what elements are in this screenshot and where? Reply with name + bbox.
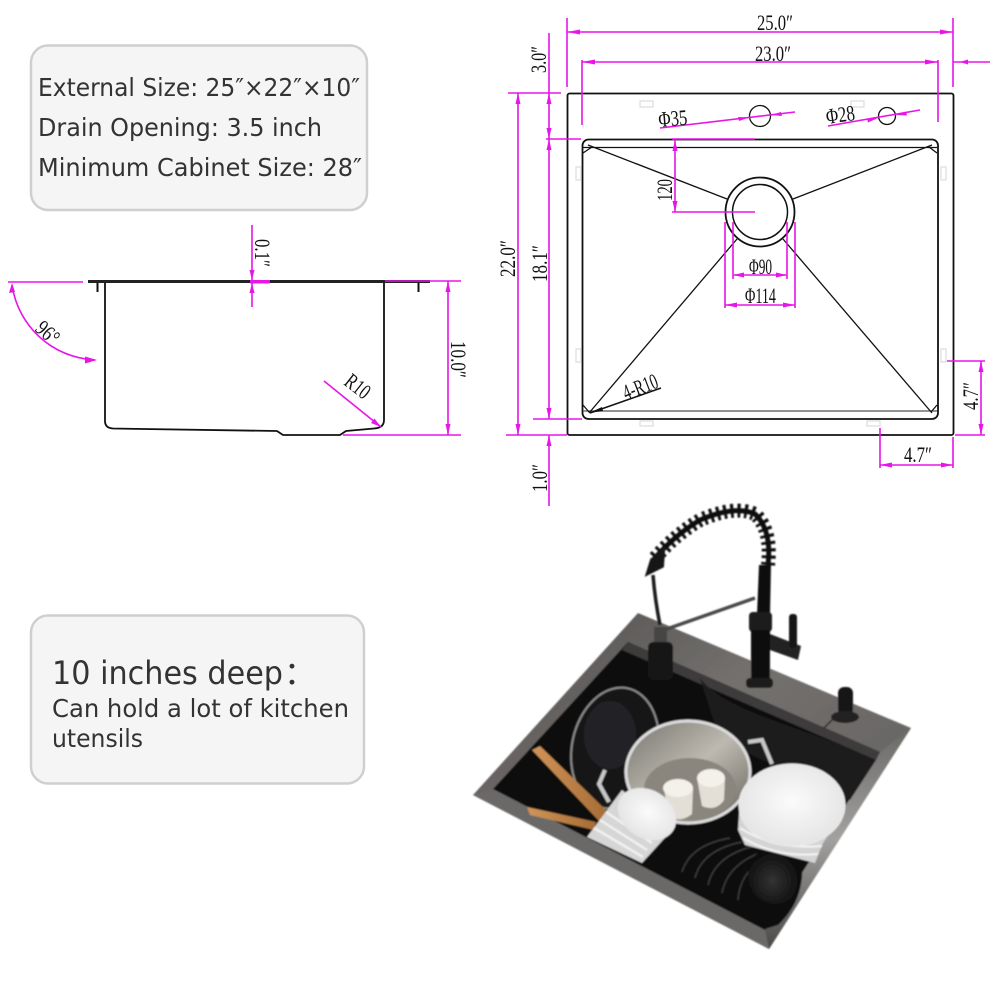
dimension: 120: 120 — [652, 179, 677, 201]
text: drain opening: Drain Opening: 3.5 inch — [38, 113, 322, 142]
wok pan — [560, 679, 670, 817]
mounting clips — [576, 101, 946, 426]
dimension: 4-R10 corner radius: 4-R10 — [619, 368, 661, 405]
dimension: 1.0 inch: 1.0″ — [527, 464, 552, 492]
white bowl stack — [587, 777, 686, 863]
faucet hole with diameter 28: Φ28 — [824, 100, 856, 129]
dimension: 22.0 inch — [495, 93, 567, 435]
faucet — [648, 511, 801, 688]
steel pot — [599, 721, 772, 823]
dimension: 4-R10 corner radius — [589, 368, 661, 413]
wooden spatulas — [527, 746, 608, 830]
dimension: diameter 114 — [725, 222, 795, 308]
dimension: 18.1 inch — [527, 139, 582, 419]
sink deck — [473, 613, 911, 949]
black bowl stack — [652, 835, 802, 929]
text: minimum cabinet size: Minimum Cabinet Size: 28″ — [38, 153, 362, 182]
heading: 10 inches deep: 10 inches deep — [52, 654, 283, 692]
sink outline — [568, 94, 954, 435]
dimension: 96 degree angle: 96° — [31, 315, 65, 350]
text: capacity description: Can hold a lot of kitchen — [52, 694, 349, 723]
white cups in pot — [663, 769, 725, 819]
dimension: 10.0 inch depth — [343, 281, 471, 435]
dimension: 4.7 inch horizontal: 4.7″ — [904, 442, 932, 467]
dimension: diameter 114: Φ114 — [745, 283, 776, 308]
faucet hole with diameter 35 — [657, 105, 795, 132]
dimension: 25.0 inch width: 25.0″ — [757, 10, 793, 35]
dimension: 4.7 inch horizontal — [880, 428, 953, 468]
white plate stack — [738, 764, 845, 863]
panel: depth note — [31, 616, 364, 784]
dimension: diameter 90: Φ90 — [749, 254, 772, 279]
sink side profile — [88, 280, 430, 435]
dimension: 23.0 inch width: 23.0″ — [755, 41, 791, 66]
dimension: 10.0 inch depth: 10.0″ — [446, 341, 471, 378]
dimension: 0.1 inch: 0.1″ — [250, 239, 275, 267]
sink photo — [473, 511, 911, 949]
dimension: 0.1 inch — [250, 225, 275, 307]
soap dispenser — [824, 687, 859, 728]
basin interior — [493, 642, 880, 930]
dimension: 23.0 inch width — [582, 41, 990, 125]
text: capacity description: utensils — [52, 724, 143, 753]
dimension: 4.7 inch vertical: 4.7″ — [958, 382, 983, 410]
faucet hole with diameter 35: Φ35 — [657, 105, 688, 132]
dimension: R10: R10 — [340, 368, 376, 404]
panel: size specifications — [31, 46, 367, 210]
dimension: 4.7 inch vertical — [947, 361, 985, 435]
top view drawing — [495, 10, 990, 506]
dimension: 96 degree angle — [8, 282, 97, 364]
dimension: 3.0 inch — [508, 33, 581, 139]
heading: 10 inches deep: ： — [284, 648, 316, 694]
faucet hole with diameter 28 — [824, 100, 920, 129]
dimension: 22.0 inch: 22.0″ — [495, 240, 520, 277]
dimension: 3.0 inch: 3.0″ — [526, 46, 551, 73]
side view drawing — [8, 225, 471, 435]
dimension: R10 — [324, 368, 381, 427]
dimension: 1.0 inch — [527, 435, 552, 506]
dimension: 25.0 inch width — [567, 10, 953, 87]
dimension: diameter 90 — [733, 222, 787, 279]
text: external size: External Size: 25″×22″×10″ — [38, 73, 360, 102]
dimension: 18.1 inch: 18.1″ — [527, 245, 552, 282]
dimension: 120 — [652, 139, 755, 212]
